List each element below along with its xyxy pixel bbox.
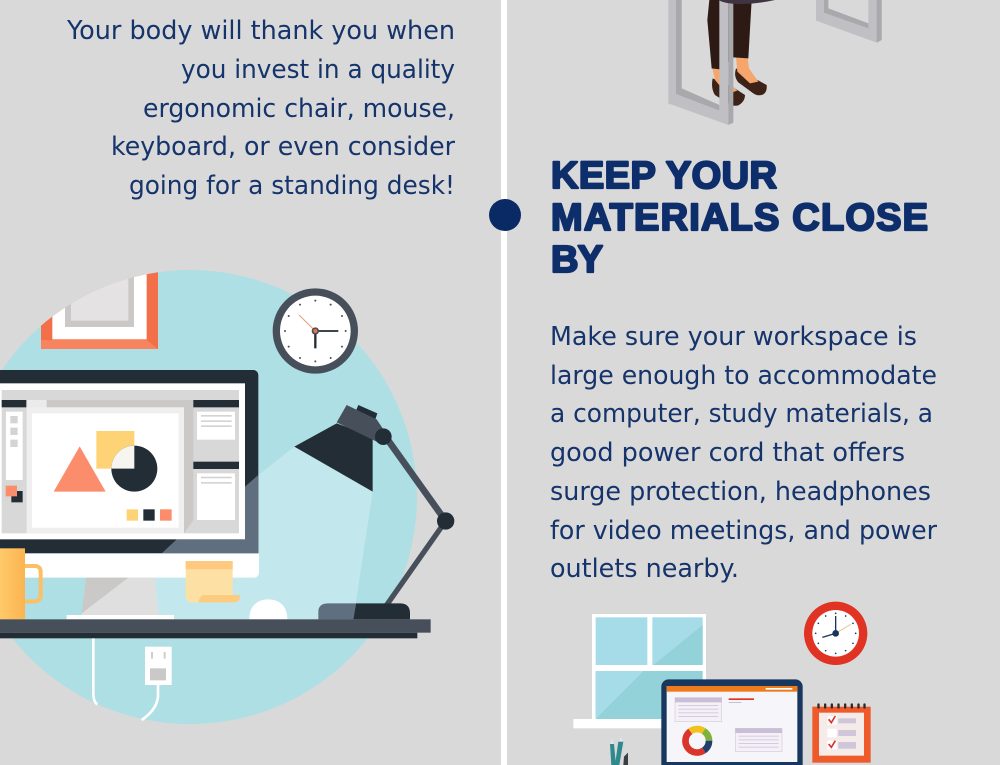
text block: workspace advice: outlets nearby. [550, 554, 739, 584]
illustration: workspace with window, laptop and clock [573, 602, 871, 765]
window [573, 614, 706, 728]
timeline divider [501, 0, 507, 765]
text block: ergonomic advice: you invest in a quality [181, 55, 455, 85]
illustration: standing desk legs and frame [668, 0, 882, 125]
heading: keep your materials close by: KEEP YOUR [551, 155, 777, 197]
heading: keep your materials close by: MATERIALS CLOSE [551, 197, 928, 239]
text block: ergonomic advice: keyboard, or even consider [111, 132, 455, 162]
wall picture [41, 272, 158, 349]
front desk frame rear post [668, 0, 719, 111]
donut chart [685, 729, 709, 753]
wall outlet with plug [142, 647, 172, 720]
mug [0, 548, 41, 619]
front desk frame near post [668, 0, 733, 125]
wall clock [273, 288, 358, 374]
text block: ergonomic advice: ergonomic chair, mouse, [143, 94, 455, 124]
monitor [0, 370, 259, 578]
desk lamp [294, 405, 454, 619]
text block: workspace advice [550, 322, 937, 584]
light beam [83, 447, 373, 619]
timeline dot [489, 199, 521, 231]
pencils [610, 737, 628, 765]
text block: workspace advice: good power cord that offers [550, 438, 905, 468]
checklist notepad [812, 703, 871, 763]
text block: ergonomic advice: Your body will thank you when [66, 16, 455, 46]
monitor stand [67, 578, 174, 619]
text block: workspace advice: a computer, study materials, a [550, 399, 933, 429]
heading: keep your materials close by [551, 155, 928, 281]
text block: workspace advice: surge protection, headphones [550, 477, 931, 507]
text block: workspace advice: Make sure your workspace is [550, 322, 917, 352]
legs and shoes [707, 0, 767, 106]
power cord [93, 638, 97, 704]
rear desk frame [816, 0, 882, 43]
desk top [718, 0, 775, 4]
background circle [0, 270, 417, 724]
desk [0, 619, 431, 638]
text block: workspace advice: for video meetings, and power [550, 516, 937, 546]
text block: ergonomic advice [66, 16, 455, 201]
heading: keep your materials close by: BY [551, 239, 603, 281]
sticky note [186, 561, 240, 602]
red clock [804, 602, 867, 665]
laptop [661, 679, 803, 765]
mouse [249, 599, 287, 619]
text block: workspace advice: large enough to accommodate [550, 361, 937, 391]
text block: ergonomic advice: going for a standing desk! [129, 171, 455, 201]
illustration: desk with monitor and lamp [0, 260, 454, 724]
